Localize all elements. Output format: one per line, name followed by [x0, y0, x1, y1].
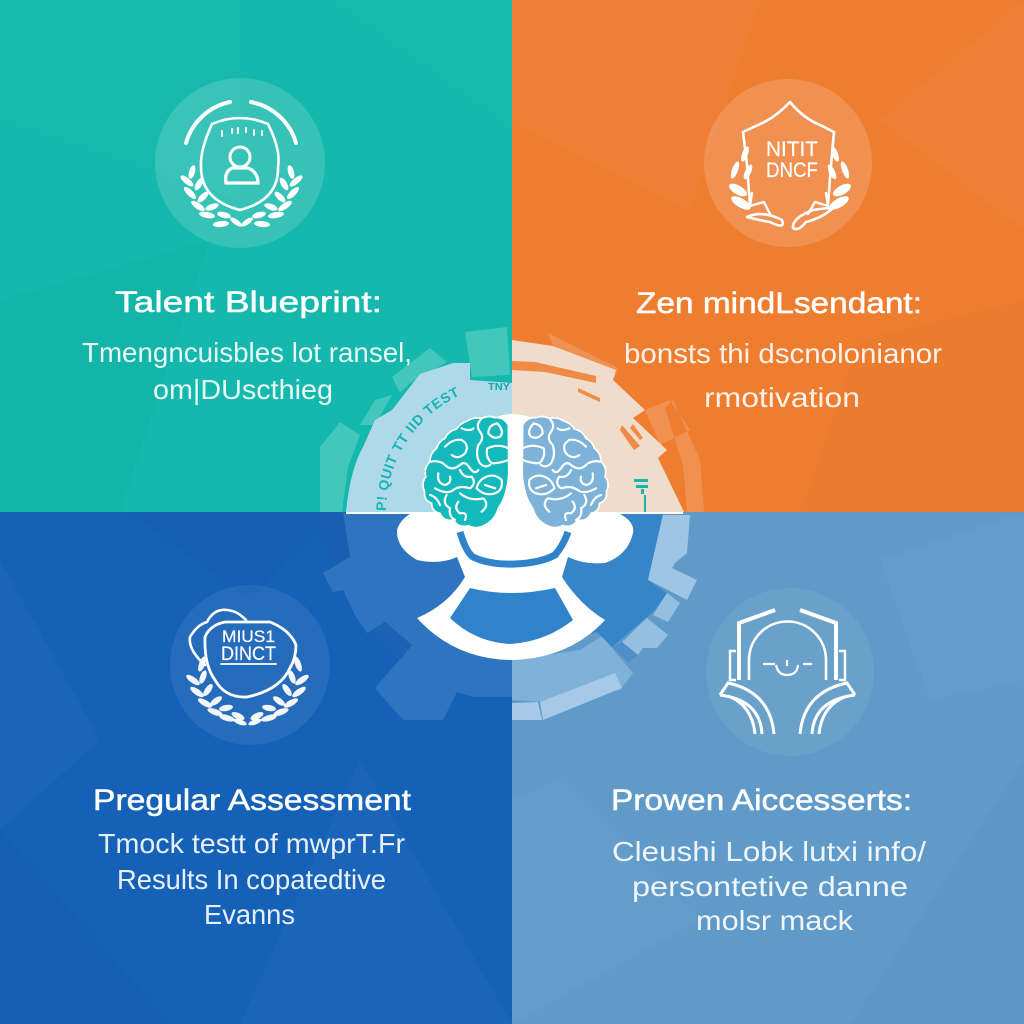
heading: regular assessment: Pregular Assessment — [93, 784, 412, 817]
icon: crest with laurel: NITIT — [766, 138, 818, 161]
text block: regular assessment: Tmock testt of mwprT.Fr — [98, 828, 405, 859]
text block: regular assessment: Results In copatedtive — [117, 864, 386, 895]
text block: proven accessments: molsr mack — [696, 905, 854, 936]
icon: badge with laurel: DINCT — [221, 644, 276, 665]
text block: zen mindset — [624, 338, 942, 413]
heading: talent blueprint: Talent Blueprint: — [115, 286, 382, 319]
panel: proven accessments — [512, 512, 1024, 1024]
icon: figure under roof — [706, 588, 874, 756]
text block: proven accessments: persontetive danne — [632, 871, 908, 902]
text block: proven accessments — [612, 836, 926, 936]
white figure — [346, 414, 683, 660]
text block: talent blueprint — [82, 337, 412, 405]
icon: badge with laurel — [170, 585, 330, 745]
text block: proven accessments: Cleushi Lobk lutxi info/ — [612, 836, 926, 867]
gear: lower right quadrant — [512, 513, 697, 720]
text block: regular assessment: Evanns — [204, 899, 295, 930]
icon: crest with laurel — [704, 79, 872, 247]
panel: zen mindset — [512, 0, 1024, 512]
text block: talent blueprint: om|DUscthieg — [153, 374, 333, 405]
heading: zen mindset: Zen mindLsendant: — [636, 287, 922, 320]
icon: badge with laurel: MIUS1 — [222, 627, 275, 646]
panel: talent blueprint — [0, 0, 512, 512]
brain: right hemisphere — [522, 416, 608, 528]
gear ring small label: TNY — [488, 382, 510, 393]
icon: shield with person and laurel — [155, 78, 325, 248]
text block: talent blueprint: Tmengncuisbles lot ransel, — [82, 337, 412, 368]
brain: left hemisphere — [423, 416, 509, 528]
text block: regular assessment — [98, 828, 405, 930]
gear: lower left quadrant — [310, 513, 512, 720]
text block: zen mindset: bonsts thi dscnolonianor — [624, 338, 942, 369]
panel: regular assessment — [0, 512, 512, 1024]
gear ring text: P! QUIT TT IID TEST — [376, 386, 457, 510]
heading: proven accessments: Prowen Aiccesserts: — [611, 784, 912, 817]
text block: zen mindset: rmotivation — [704, 382, 860, 413]
central gear — [320, 327, 704, 720]
icon: crest with laurel: DNCF — [766, 159, 818, 182]
